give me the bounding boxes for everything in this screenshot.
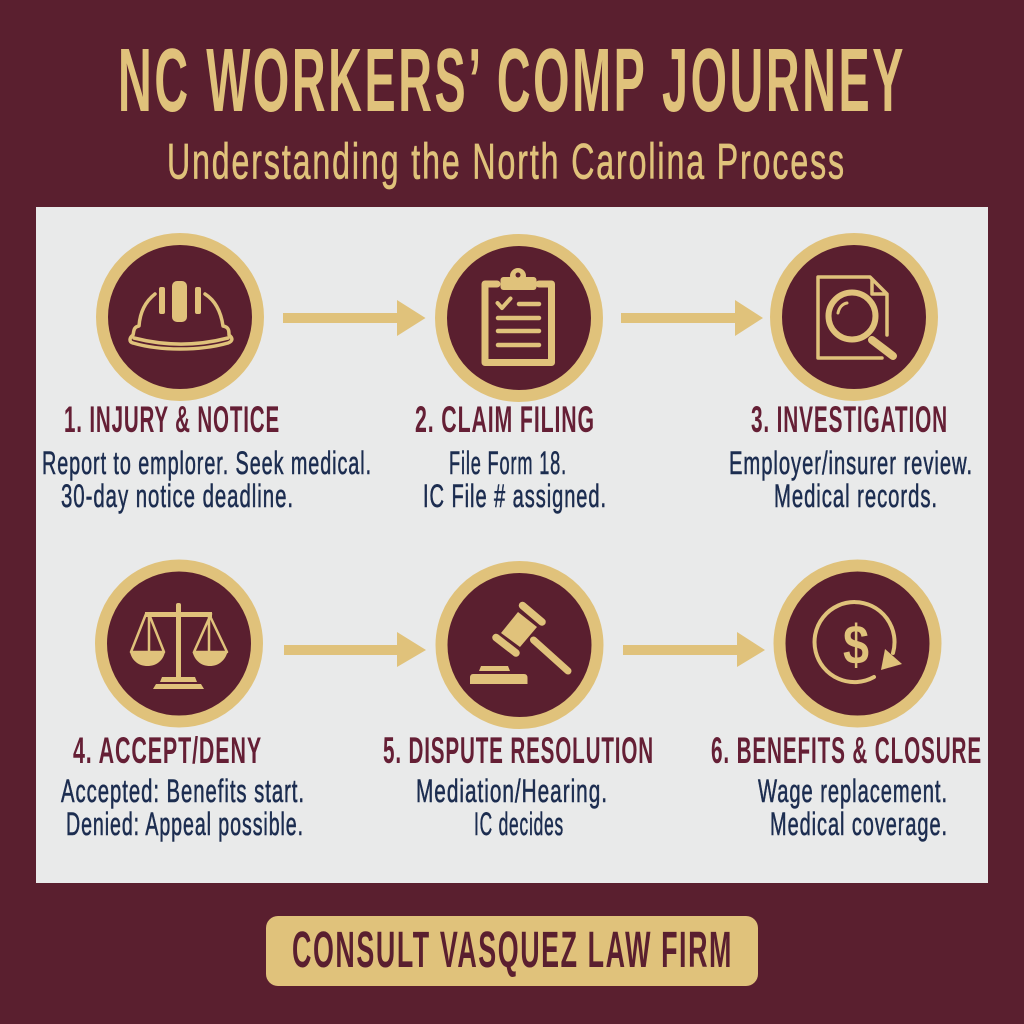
step 6: benefits and closure [711, 566, 982, 842]
step 5 description: IC decides [474, 806, 564, 842]
icon: document with magnifier [776, 239, 932, 395]
arrow: step 5 to step 6 [623, 632, 765, 667]
panel: process steps [36, 207, 988, 883]
step 1 description: Report to emplorer. Seek medical. [42, 445, 372, 481]
step 2 description: File Form 18. [449, 445, 567, 481]
step 4 heading: 4. ACCEPT/DENY [73, 730, 262, 771]
icon: clipboard [441, 240, 597, 396]
step 4 description [61, 773, 305, 842]
step 5 description: Mediation/Hearing. [416, 773, 608, 809]
step 2 heading: 2. CLAIM FILING [415, 399, 595, 440]
step 5 description [416, 773, 608, 842]
arrow: step 1 to step 2 [283, 300, 426, 336]
step 4 description: Denied: Appeal possible. [66, 806, 304, 842]
step 5: dispute resolution [383, 567, 654, 842]
icon: hard hat [102, 239, 258, 395]
icon: scales of justice [101, 566, 257, 722]
step 5 heading: 5. DISPUTE RESOLUTION [383, 730, 654, 771]
step 3 description [729, 445, 973, 514]
step 1 description: 30-day notice deadline. [61, 478, 294, 514]
icon: dollar with circular arrow [780, 566, 936, 722]
step 1: injury and notice [42, 239, 372, 514]
step 2: claim filing [415, 240, 607, 514]
icon: gavel [442, 567, 598, 723]
step 4: accept or deny [61, 566, 305, 842]
step 6 description [758, 773, 948, 842]
step 2 description: IC File # assigned. [423, 478, 607, 514]
arrow: step 2 to step 3 [621, 300, 763, 336]
step 1 description [42, 445, 372, 514]
step 3: investigation [729, 239, 973, 514]
step 2 description [423, 445, 607, 514]
call to action button [266, 916, 758, 986]
step 1 heading: 1. INJURY & NOTICE [64, 399, 280, 440]
step 4 description: Accepted: Benefits start. [61, 773, 305, 809]
arrow: step 4 to step 5 [284, 632, 426, 667]
icon: dollar with circular arrow: $ [843, 613, 869, 676]
